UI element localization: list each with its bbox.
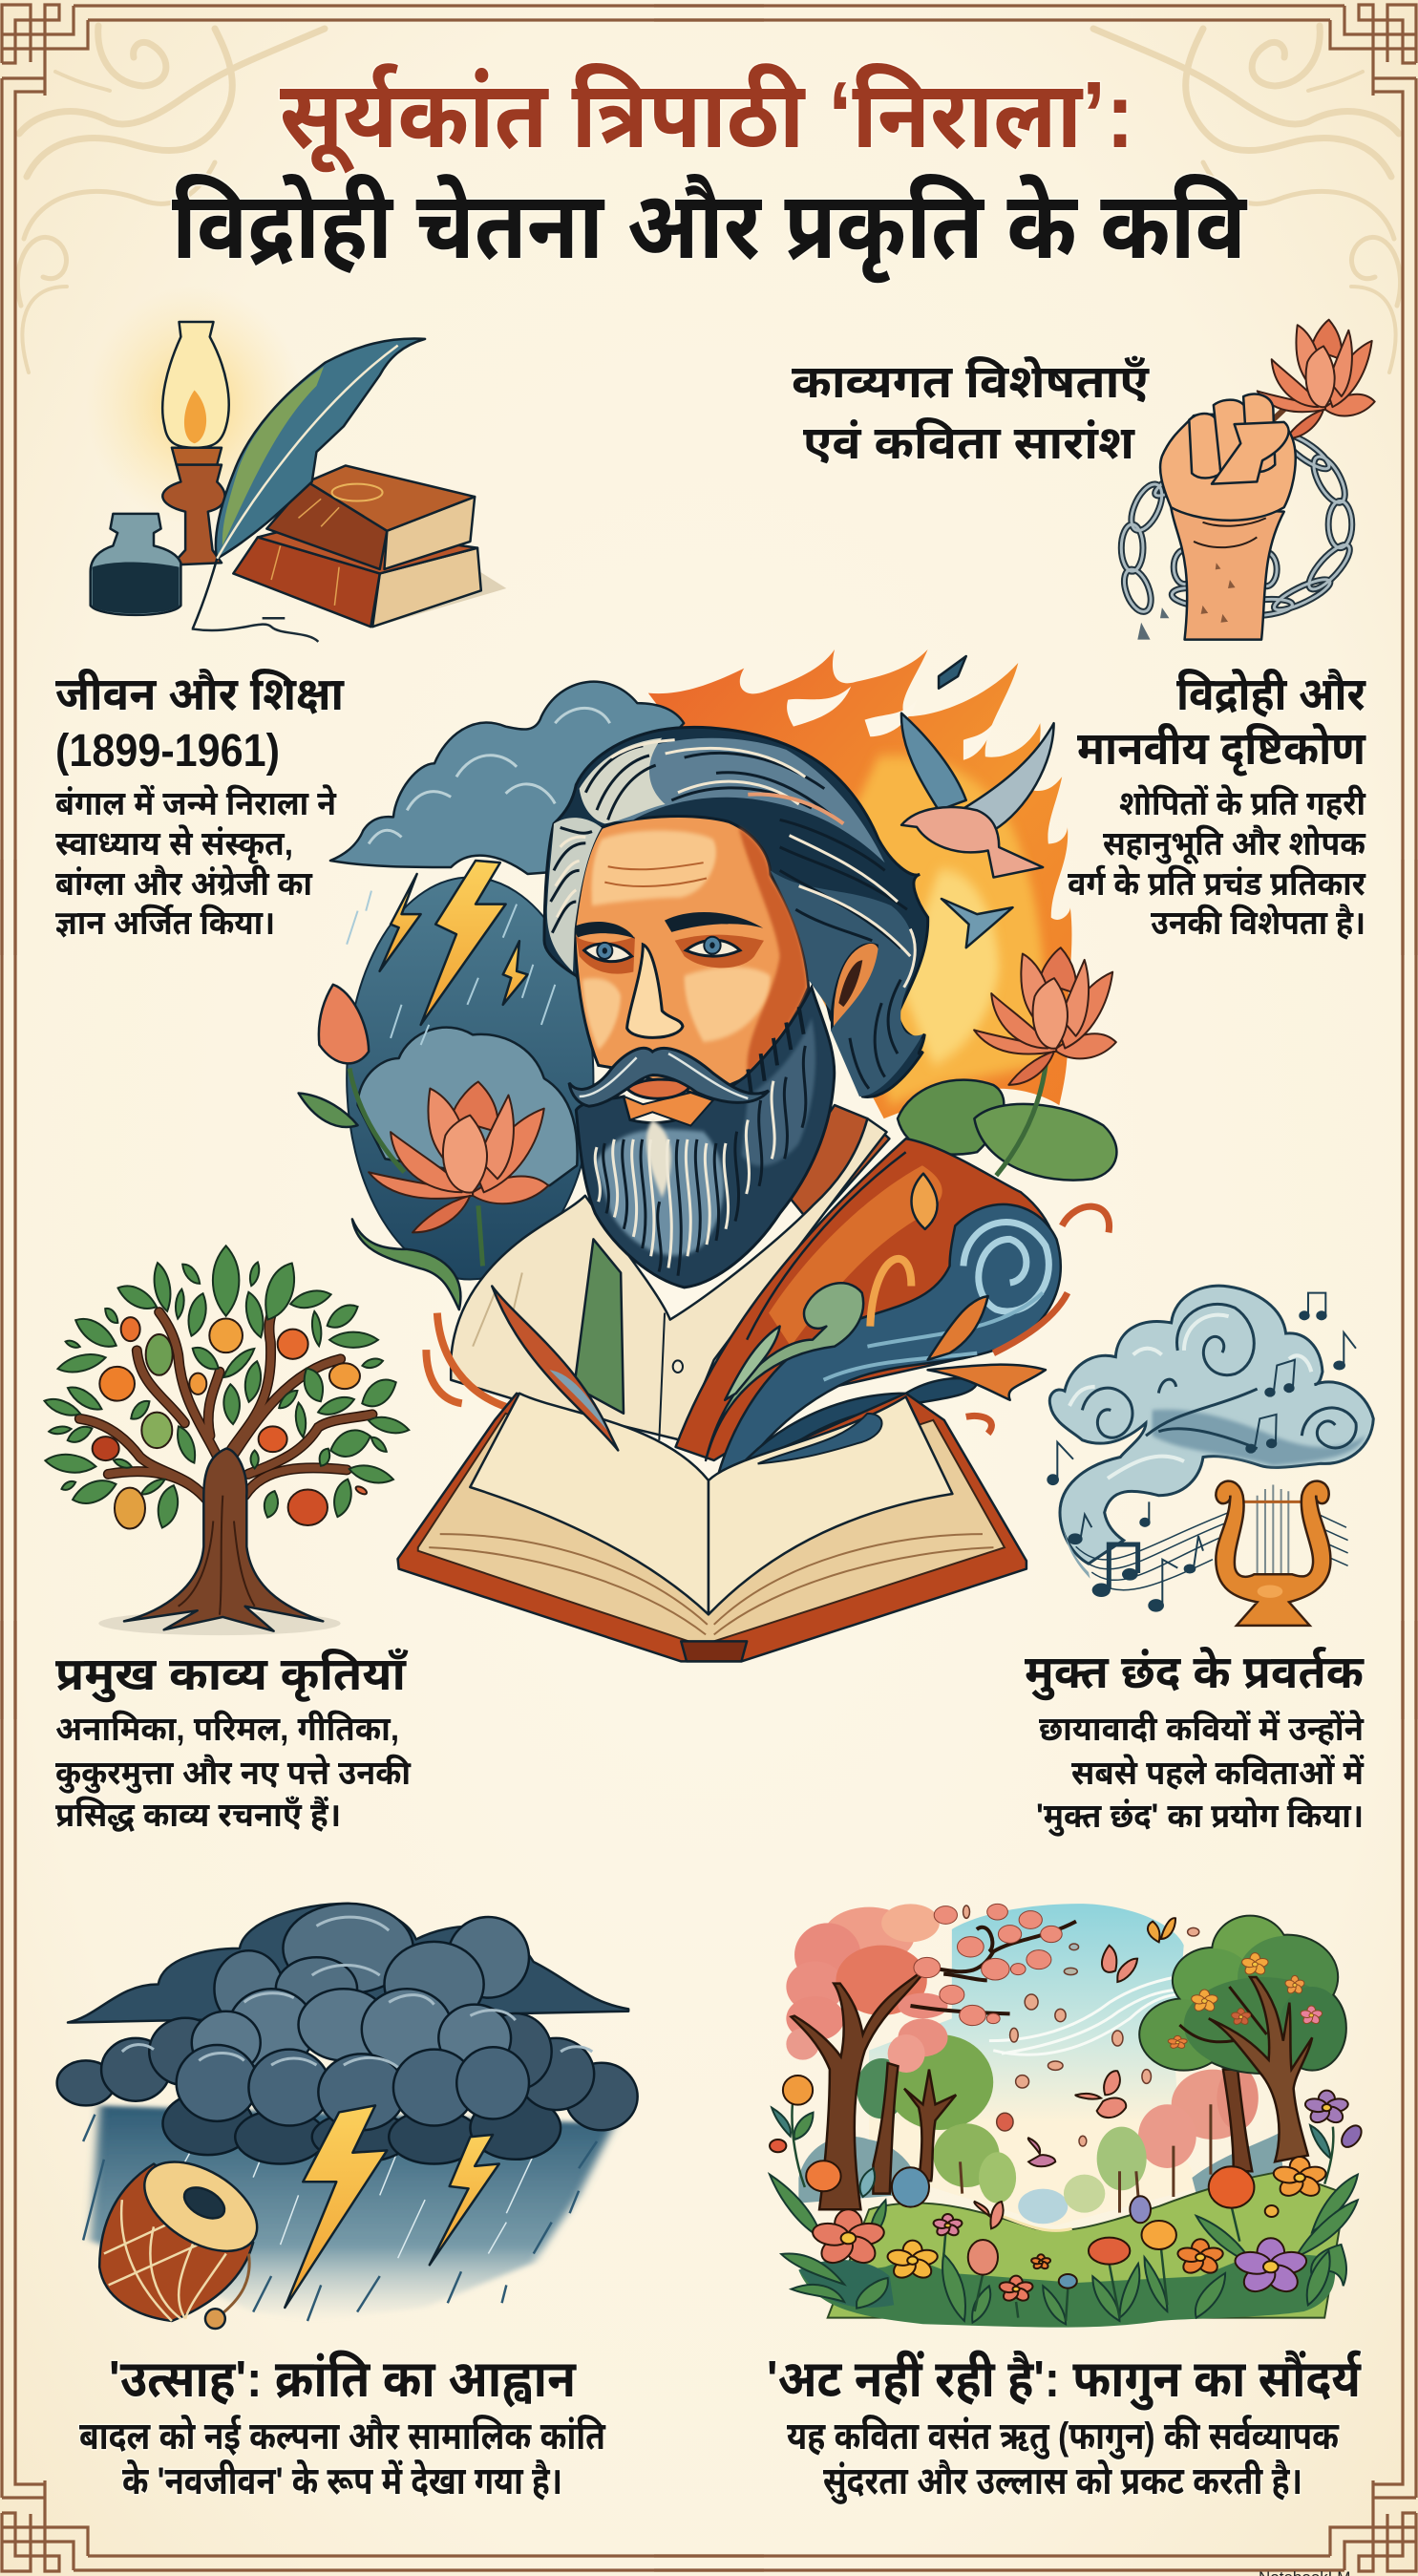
text block: major works [55,1648,412,1834]
text block: major works: प्रसिद्ध काव्य रचनाएँ हैं। [55,1796,341,1834]
body: अनामिका, परिमल, गीतिका, [55,1710,399,1748]
wave swirls [703,1204,1110,1554]
pink blossom crown [786,1904,948,2073]
lightning bolts [380,861,528,1025]
text block: life and education: (1899-1961) [55,726,280,777]
heading: मुक्त छंद के प्रवर्तक [1025,1646,1365,1700]
text block: rebellious and humane outlook: सहानुभूति और शोपक [1103,824,1366,864]
rain [91,2105,615,2321]
text block: life and education: स्वाध्याय से संस्कृत, [55,824,293,864]
rain streaks [347,891,555,1045]
blossoms [914,1904,1062,2026]
corner swirl decorations [17,26,1401,373]
icon: spring garden scene [770,1904,1365,2328]
body: छायावादी कवियों में उन्होंने [1039,1710,1365,1748]
beard [569,988,835,1288]
storm circle [347,878,593,1280]
text block: At Nahin Rahi Hai poem [767,2350,1363,2504]
text block: At Nahin Rahi Hai poem: सुंदरता और उल्लास को प्रकट करती है। [823,2459,1302,2504]
heading: 'उत्साह': क्रांति का आह्वान [109,2350,578,2408]
text block: Utsah poem: के 'नवजीवन' के रूप में देखा गया है। [122,2459,562,2502]
head: face, hair, beard [547,738,923,1288]
heading: विद्रोही और [1176,669,1366,720]
text block: life and education: ज्ञान अर्जित किया। [55,904,275,942]
body: शोपितों के प्रति गहरी [1119,784,1366,822]
title line 1: सूर्यकांत त्रिपाठी ‘निराला’: [280,62,1134,174]
heading: प्रमुख काव्य कृतियाँ [55,1648,409,1702]
lily pads and right lotus [898,1052,1116,1181]
lotus left [369,1082,548,1232]
distant hills [798,2133,1283,2203]
text block: life and education [55,669,345,942]
heading: जीवन और शिक्षा [55,669,345,720]
text block: pioneer of free verse: सबसे पहले कविताओं में [1071,1754,1365,1792]
back cloud [68,1904,628,2022]
text block: rebellious and humane outlook: उनकी विशेपता है। [1151,903,1365,942]
text block: pioneer of free verse [1025,1646,1365,1837]
main cloud puffs [57,1904,638,2164]
icon: fist breaking chains with lotus [1120,320,1375,640]
face [573,817,809,1096]
trunks [792,1968,1252,2209]
dholak drum [99,2154,280,2329]
shawl [676,1139,1058,1460]
butterflies and petals [974,1918,1175,2228]
kurta, stole and shawl [451,1105,1058,1460]
storm cloud [330,682,684,874]
foreground foliage [770,2104,1358,2328]
right tree [1140,1917,1345,2073]
kurta [451,1118,887,1440]
icon: oil lamp, feather, ink and books [86,286,506,642]
orange wisps left [426,1313,506,1407]
lightning [285,2105,499,2308]
icon: swirling cloud, music notes and lyre [1048,1286,1373,1626]
hill [828,2171,1345,2318]
central portrait illustration [299,649,1116,1661]
text block: rebellious and humane outlook [1068,669,1366,942]
lotus stem and leaf left [299,985,482,1309]
red quill [492,1287,618,1450]
body: बंगाल में जन्मे निराला ने [55,784,337,822]
text block: life and education: बांग्ला और अंग्रेजी का [55,864,313,903]
neck [780,1105,889,1225]
title [172,62,1248,284]
sky [869,1904,1200,2225]
section subtitle: काव्यगत विशेषताएँ [792,355,1150,408]
flames behind poet [648,649,1071,1118]
ear [832,942,881,1033]
open book [398,1394,1026,1661]
lower cloud [358,1028,578,1185]
text block: rebellious and humane outlook: मानवीय दृष्टिकोण [1077,723,1366,777]
background: flames, storm, clouds, lotuses and birds [299,649,1116,1309]
text block: Utsah poem [79,2350,606,2502]
section subtitle: एवं कविता सारांश [803,417,1136,469]
birds [901,656,1054,947]
green stole [574,1239,624,1414]
icon: fruit tree [43,1245,410,1635]
body: बादल को नई कल्पना और सामालिक कांति [79,2415,606,2458]
icon: storm cloud, lightning and drum [57,1904,638,2329]
section subtitle [792,355,1150,469]
red quill, waves and open book [398,1204,1110,1661]
text block: major works: कुकुरमुत्ता और नए पत्ते उनकी [55,1754,412,1794]
flowers [809,2091,1350,2303]
heading: 'अट नहीं रही है': फागुन का सौंदर्य [767,2350,1363,2412]
text block: pioneer of free verse: 'मुक्त छंद' का प्रयोग किया। [1036,1797,1364,1837]
hair back [544,727,928,1097]
top hair [547,738,923,1096]
distant trees [857,2034,1259,2213]
text block: rebellious and humane outlook: वर्ग के प्रति प्रचंड प्रतिकार [1068,864,1366,903]
title line 2: विद्रोही चेतना और प्रकृति के कवि [172,173,1248,284]
